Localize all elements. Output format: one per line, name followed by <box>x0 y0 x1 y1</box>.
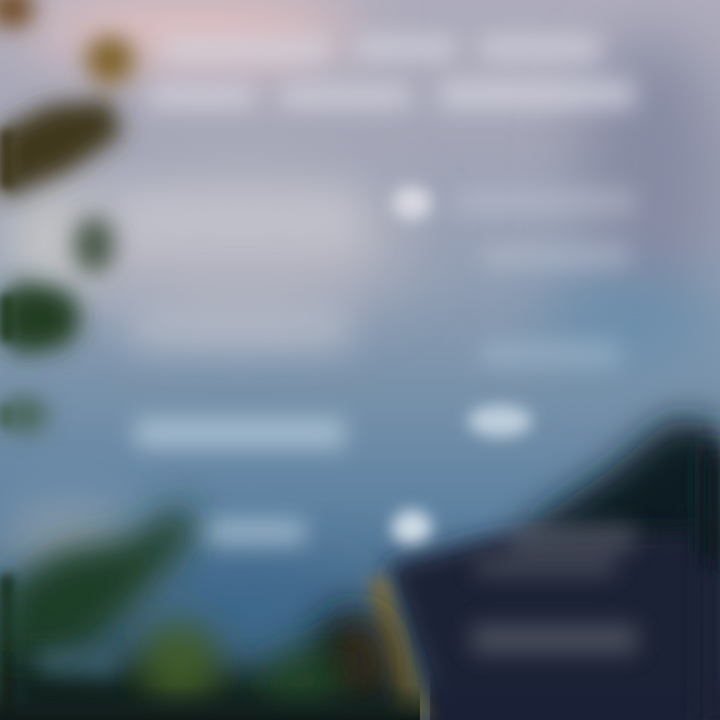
edge shading: bottom foreground <box>0 685 420 720</box>
foliage: blurred leaves on left <box>0 0 410 720</box>
text block: lower left label <box>205 520 305 544</box>
heading: blurred title text <box>150 36 635 108</box>
text block: middle right line <box>480 342 620 366</box>
roof edges: bottom and right fill <box>430 430 720 720</box>
text block: middle left label <box>135 418 345 448</box>
mountain silhouette <box>530 420 720 570</box>
text block: upper left paragraph <box>120 190 360 350</box>
text block: upper right paragraph <box>455 190 635 267</box>
icon: bright dot upper <box>392 186 432 220</box>
icon: bright dot lower <box>392 510 432 546</box>
icon: bright patch middle <box>468 405 532 437</box>
roof: dark building <box>385 530 720 720</box>
roof edge: golden trim <box>368 575 430 720</box>
text block: lines over roof <box>472 525 637 653</box>
